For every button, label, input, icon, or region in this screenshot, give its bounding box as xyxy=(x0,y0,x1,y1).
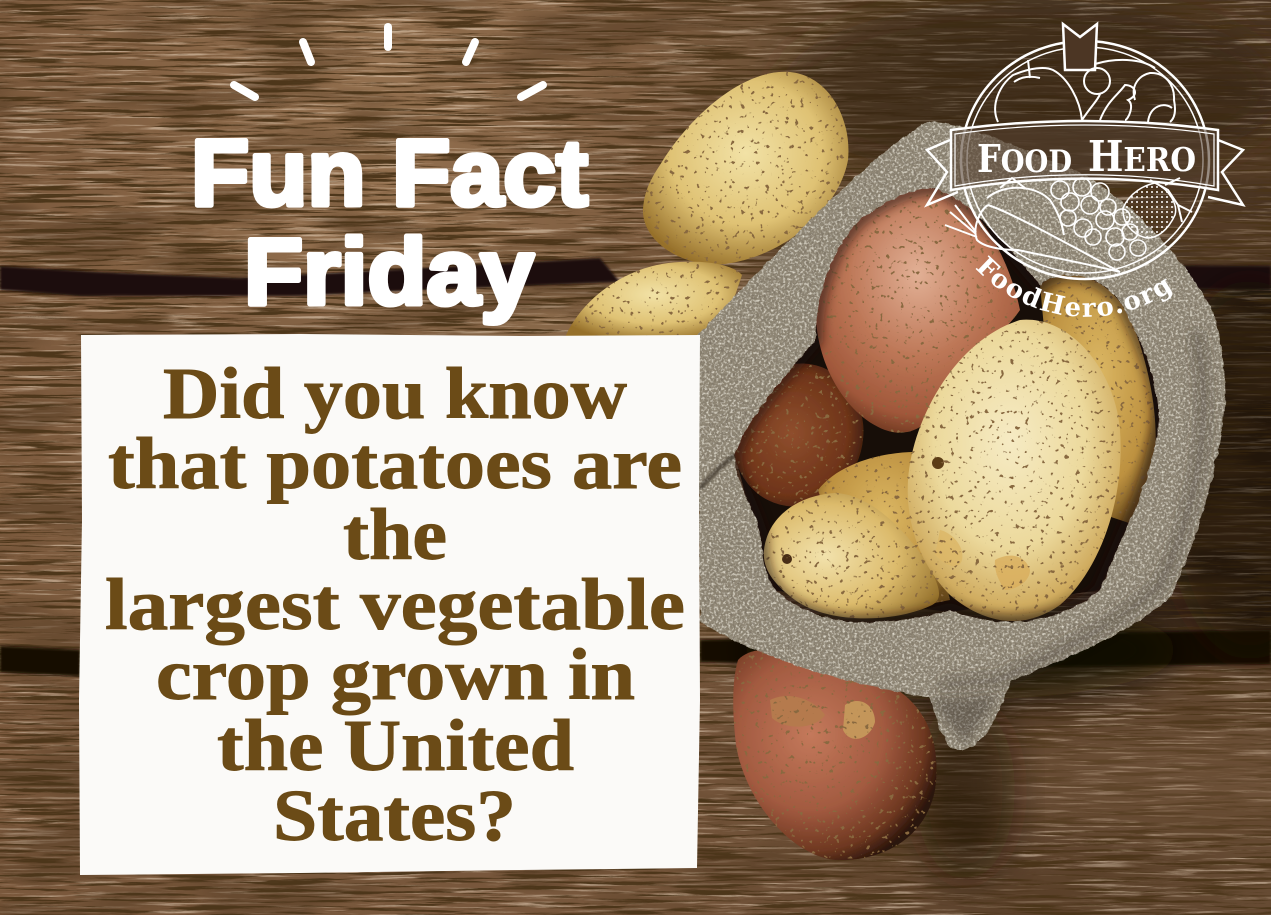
logo ribbon left xyxy=(927,140,958,205)
fact text: the xyxy=(343,494,447,575)
icon: potato big yellow xyxy=(908,320,1121,621)
icon: potato back right yellow xyxy=(1040,274,1156,525)
logo bookmark xyxy=(1063,24,1097,70)
sack rim shadow xyxy=(735,188,1159,622)
icon: potato red xyxy=(816,188,1020,433)
title: Friday xyxy=(244,219,534,324)
logo: Food Hero xyxy=(924,21,1246,317)
rays xyxy=(234,27,543,97)
logo apple xyxy=(995,60,1082,122)
icon: potato small yellow xyxy=(764,493,939,618)
logo wordmark: HERO xyxy=(1088,132,1196,181)
logo strawberry leaves xyxy=(1150,178,1192,222)
logo broccoli xyxy=(1082,60,1175,122)
fact text: States? xyxy=(273,775,516,856)
icon: potato middle yellow xyxy=(818,452,950,610)
logo parsnip xyxy=(987,178,1064,235)
fact text: largest vegetable xyxy=(105,564,685,645)
logo banner xyxy=(951,121,1218,190)
sack interior xyxy=(735,188,1159,612)
logo url: FoodHero.org xyxy=(976,255,1172,317)
logo strawberry xyxy=(1123,183,1176,238)
icon: potato dark red xyxy=(717,349,879,521)
title: Fun Fact xyxy=(191,120,588,225)
fact text: the United xyxy=(217,705,574,786)
icon: potato back yellow xyxy=(566,262,742,340)
logo carrot xyxy=(945,205,1120,272)
sack shadow xyxy=(740,600,1180,700)
logo ribbon right xyxy=(1208,140,1243,205)
burlap sack xyxy=(697,122,1225,750)
fact text: Did you know xyxy=(163,353,627,434)
logo wordmark: FOOD xyxy=(977,136,1072,181)
icon: potato bottom red xyxy=(733,650,937,860)
sack shading xyxy=(700,330,1203,745)
logo grapes xyxy=(1051,178,1146,260)
fact text xyxy=(105,353,685,856)
title xyxy=(191,120,588,324)
white text panel xyxy=(79,334,700,875)
fact text: that potatoes are xyxy=(108,423,682,504)
logo wordmark xyxy=(977,132,1196,181)
fact text: crop grown in xyxy=(156,634,635,715)
icon: potato top yellow xyxy=(643,72,848,264)
logo rings xyxy=(961,41,1209,279)
